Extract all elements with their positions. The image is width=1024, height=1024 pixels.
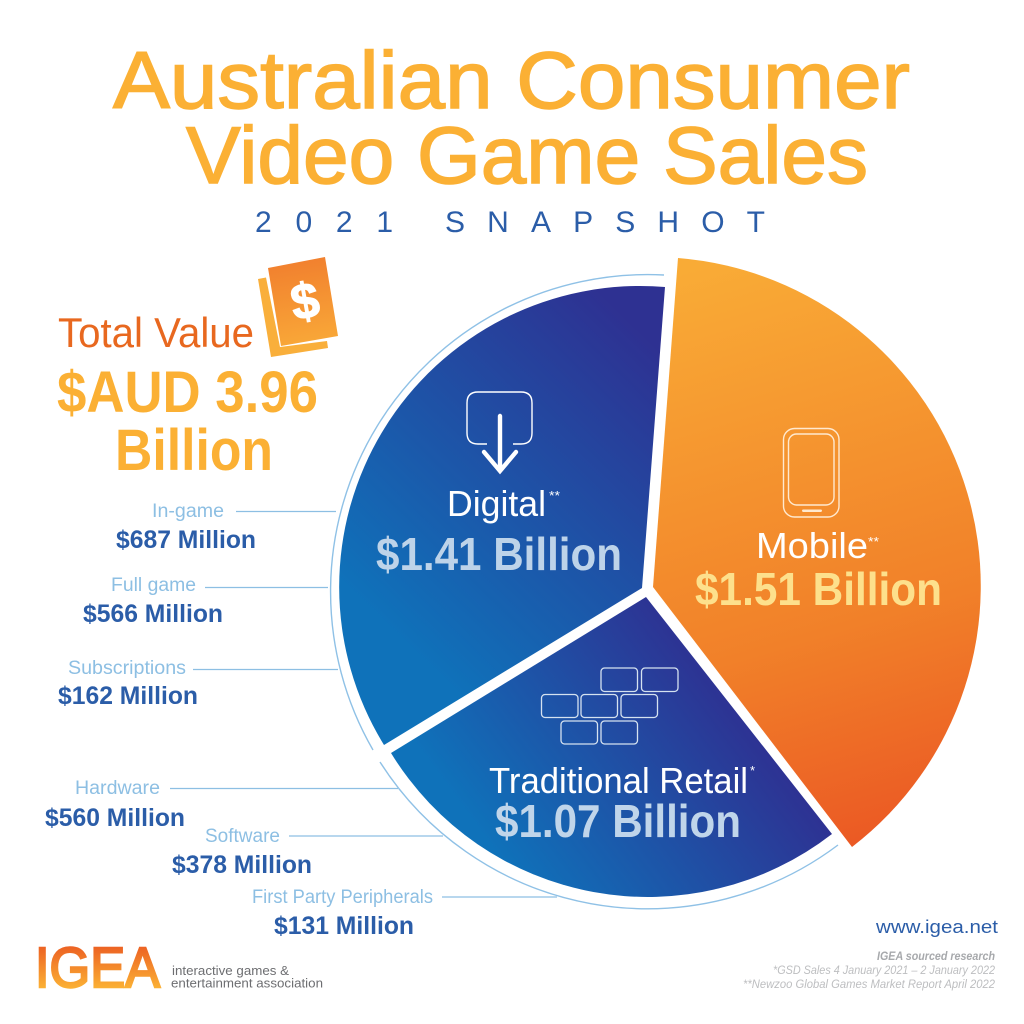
total value <box>57 309 318 483</box>
callout: software <box>172 826 443 879</box>
callout: hardware: $560 Million <box>45 804 185 832</box>
sources <box>743 951 996 991</box>
slice: traditional retail <box>391 597 832 897</box>
title: Video Game Sales <box>186 111 868 201</box>
callout: first party peripherals <box>252 887 557 940</box>
traditional retail label: Traditional Retail <box>489 760 748 801</box>
callout: in-game: $687 Million <box>116 526 256 554</box>
mobile label: $1.51 Billion <box>695 563 942 615</box>
logo: IGEA: entertainment association <box>171 976 323 990</box>
callout: first party peripherals: $131 Million <box>274 912 414 940</box>
callout: hardware: Hardware <box>75 778 160 799</box>
callout: subscriptions: $162 Million <box>58 682 198 710</box>
icon: smartphone <box>784 428 839 517</box>
digital label: $1.41 Billion <box>376 528 622 580</box>
callout: full game <box>83 575 328 628</box>
icon: money notes: $ <box>286 271 324 331</box>
callout: subscriptions: Subscriptions <box>68 658 186 679</box>
title <box>113 36 910 201</box>
subtitle: 2021 <box>255 206 393 239</box>
traditional retail label <box>489 760 755 847</box>
subtitle <box>255 206 765 239</box>
digital label: Digital <box>447 483 546 524</box>
callout: full game: Full game <box>111 575 196 596</box>
callout: in-game: In-game <box>152 501 224 522</box>
pie chart <box>331 258 981 909</box>
mobile label: Mobile <box>756 525 868 566</box>
logo: IGEA <box>35 936 323 1000</box>
outer ring <box>331 275 838 909</box>
icon: money notes <box>258 257 338 357</box>
total value: Billion <box>115 418 273 483</box>
callout: full game: $566 Million <box>83 600 223 628</box>
callout: first party peripherals: First Party Peripherals <box>252 887 433 908</box>
callout: software: Software <box>205 826 280 847</box>
mobile label <box>695 525 942 615</box>
callout: hardware <box>45 778 398 832</box>
digital label: ** <box>549 488 560 503</box>
total value: Total Value <box>58 309 254 356</box>
sources: *GSD Sales 4 January 2021 – 2 January 2022 <box>773 965 996 977</box>
sources: **Newzoo Global Games Market Report April 2022 <box>743 979 996 991</box>
slice: digital <box>339 286 665 745</box>
icon: download <box>467 392 532 471</box>
traditional retail label: $1.07 Billion <box>495 795 741 847</box>
icon: bricks <box>542 668 678 744</box>
callout: in-game <box>116 501 336 554</box>
callout: subscriptions <box>58 658 338 710</box>
website: www.igea.net <box>875 917 998 937</box>
mobile label: ** <box>868 534 879 549</box>
logo: IGEA: IGEA <box>35 936 160 1000</box>
title: Australian Consumer <box>113 36 910 126</box>
sources: IGEA sourced research <box>877 951 995 963</box>
traditional retail label: * <box>750 763 755 778</box>
callout: software: $378 Million <box>172 851 312 879</box>
total value: $AUD 3.96 <box>57 360 318 425</box>
digital label <box>376 483 622 580</box>
slice: mobile <box>653 258 981 847</box>
logo: IGEA: interactive games & <box>172 963 289 978</box>
subtitle: SNAPSHOT <box>445 206 765 239</box>
